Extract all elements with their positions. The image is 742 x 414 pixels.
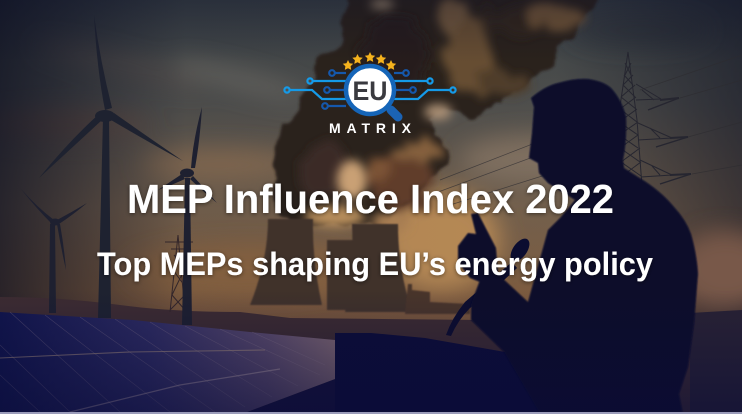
wind turbine large [39,15,183,318]
wind turbine small [21,189,87,313]
transmission pylon [618,52,691,186]
logo ring [346,66,394,114]
smoke cloud [273,0,600,232]
logo stars [343,52,396,70]
logo EU letters: EU [352,76,388,106]
ground and horizon [0,297,742,414]
title: MEP Influence Index 2022 [127,176,614,222]
podium [335,333,560,414]
power lines [430,55,742,205]
small pylon [165,235,193,312]
speaker silhouette [458,79,698,414]
logo magnifier handle [391,110,398,117]
subtitle: Top MEPs shaping EU’s energy policy [97,246,653,282]
microphone [446,235,533,336]
logo wordmark: MATRIX [329,120,412,136]
cooling towers [250,219,470,314]
solar panel [0,312,335,412]
logo: EU Matrix [284,52,456,136]
logo circuit traces [284,70,456,109]
wind turbine middle [158,107,217,325]
